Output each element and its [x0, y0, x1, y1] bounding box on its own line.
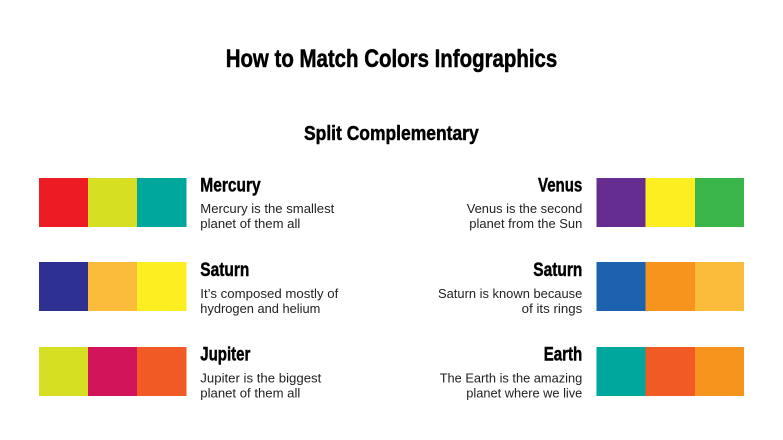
- swatches: Earth: [597, 347, 744, 396]
- heading: Mercury: Mercury: [200, 174, 261, 196]
- swatches: Mercury: [39, 178, 186, 227]
- subtitle: Split Complementary: [304, 122, 479, 145]
- text: Jupiter description: Jupiter is the biggest: [200, 370, 322, 386]
- text: Saturn right description: of its rings: [522, 301, 583, 316]
- panel: Jupiter left: [39, 344, 322, 400]
- panel: Venus right: [467, 174, 744, 231]
- text: Earth description: The Earth is the amazing: [440, 370, 582, 386]
- swatches: Saturn left: [39, 262, 186, 311]
- text: Saturn right description: [438, 286, 583, 316]
- swatches: Jupiter: [39, 347, 186, 396]
- heading: Earth: Earth: [544, 344, 582, 366]
- text: Saturn left description: [200, 286, 339, 316]
- heading: Saturn left: Saturn: [200, 259, 249, 281]
- heading: Saturn right: Saturn: [533, 259, 582, 281]
- text: Jupiter description: [200, 370, 322, 400]
- panel: Saturn right: [438, 259, 744, 316]
- panel: Mercury left: [39, 174, 335, 231]
- text: Saturn right description: Saturn is known because: [438, 286, 582, 301]
- text: Mercury description: [200, 201, 335, 231]
- panel: Earth right: [440, 344, 744, 400]
- swatches: Venus: [597, 178, 744, 227]
- heading: Venus: Venus: [538, 174, 582, 196]
- text: Mercury description: planet of them all: [200, 216, 300, 231]
- swatches: Saturn right: [597, 262, 744, 311]
- text: Venus description: Venus is the second: [467, 201, 582, 216]
- text: Earth description: [440, 370, 582, 400]
- text: Saturn left description: hydrogen and helium: [200, 301, 320, 316]
- text: Jupiter description: planet of them all: [200, 386, 300, 400]
- text: Saturn left description: It’s composed mostly of: [200, 286, 339, 301]
- text: Mercury description: Mercury is the smallest: [200, 201, 335, 216]
- text: Earth description: planet where we live: [466, 386, 582, 400]
- title: How to Match Colors Infographics: [226, 45, 557, 73]
- panel: Saturn left: [39, 259, 339, 316]
- text: Venus description: [467, 201, 582, 231]
- heading: Jupiter: Jupiter: [200, 344, 251, 366]
- text: Venus description: planet from the Sun: [469, 216, 582, 231]
